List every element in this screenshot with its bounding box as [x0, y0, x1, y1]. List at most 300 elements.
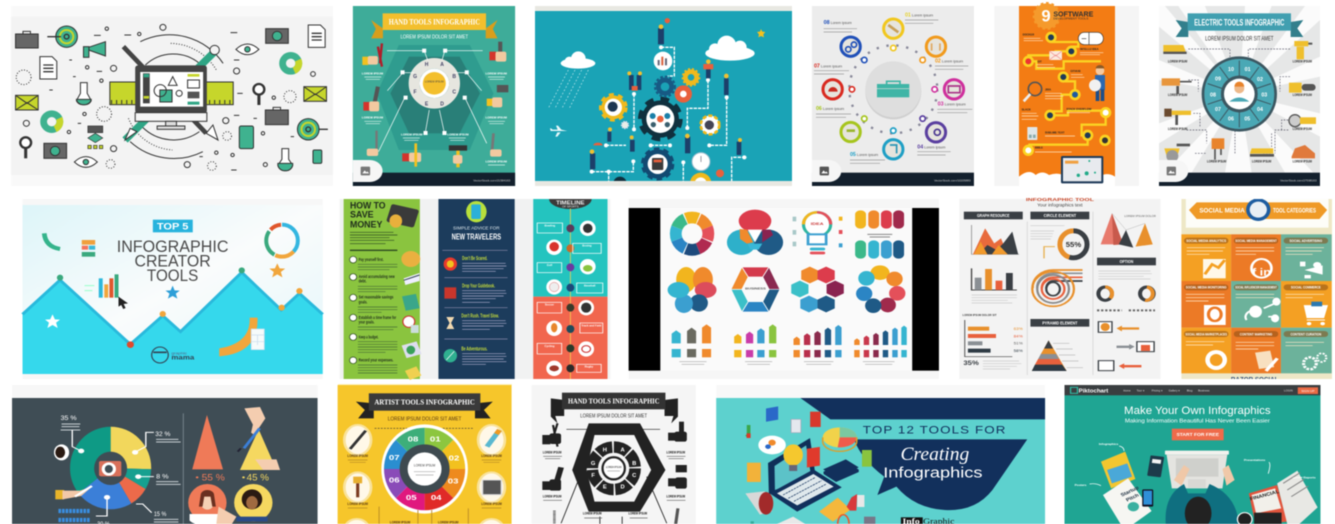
pie labels: 32 % [155, 430, 170, 438]
banner title [371, 13, 498, 41]
panel: graph resource charts [959, 198, 1160, 379]
panel: camera pie chart on dark [12, 385, 318, 524]
icon: flow chart [88, 126, 103, 149]
navy simple advice for new travelers [438, 199, 515, 379]
heading banner [1189, 198, 1327, 221]
timeline of sports: TIMELINE [556, 201, 585, 206]
footer bar: VectorStock.com/21584163 [473, 178, 511, 182]
captions [543, 450, 685, 515]
clipboard icon [1027, 127, 1037, 140]
venn circles [727, 210, 783, 255]
headline: Creating [900, 445, 969, 464]
tool captions: LOREM IPSUM [1168, 127, 1187, 131]
center toolbox [865, 61, 921, 119]
navigation bar: Business [1198, 389, 1210, 392]
logo: mama [171, 353, 195, 361]
panel: graph resource charts: OPTION [1120, 260, 1133, 265]
small captions under charts [678, 240, 895, 364]
orange curve and card [219, 318, 264, 356]
option donuts [1098, 287, 1154, 300]
decorative dots and dashes [16, 24, 315, 170]
hexagon backdrop [377, 45, 493, 150]
center wheel: 09 [1215, 76, 1221, 82]
numbered captions: 06 Lorem ipsum [816, 106, 844, 112]
numbered captions: 02 Lorem ipsum [935, 58, 963, 64]
pie icon [823, 427, 857, 451]
banner title: HAND TOOLS INFOGRAPHIC [389, 18, 480, 27]
chart bubble [654, 52, 672, 70]
airplane [550, 126, 567, 137]
captions: LOREM IPSUM [583, 511, 602, 515]
area chart [972, 225, 1019, 254]
navigation bar: Piktochart [1079, 389, 1108, 394]
category headings [1184, 238, 1328, 337]
pyramid [1032, 340, 1083, 371]
callout labels [1075, 442, 1316, 487]
green how to save money [344, 199, 422, 380]
desk laptop [1165, 451, 1229, 488]
panel: graph resource charts: CIRCLE ELEMENT [1044, 214, 1077, 219]
headline [863, 423, 1006, 481]
portraits [188, 484, 273, 524]
route nodes [1024, 33, 1110, 155]
captions: LOREM IPSUM [485, 71, 507, 75]
developer figure [1089, 65, 1105, 101]
captions: LOREM IPSUM [666, 450, 685, 454]
coffee cup [54, 444, 69, 460]
color wheel: 02 [449, 454, 460, 462]
ribbon title: LOREM IPSUM DOLOR SIT AMET [580, 414, 647, 419]
icon: magnifiers [20, 84, 264, 158]
title [1034, 3, 1093, 29]
mouse icon [1078, 32, 1103, 45]
donut pie chart [84, 441, 137, 495]
captions: LOREM IPSUM [362, 116, 384, 120]
captions [362, 71, 507, 163]
navigation bar: SIGN UP [1301, 389, 1315, 393]
navy simple advice for new travelers: Don't Rush. Travel Slow. [461, 314, 499, 319]
captions: LOREM IPSUM [485, 116, 507, 120]
petal chart [668, 267, 717, 313]
tool labels: JIRA [1045, 88, 1051, 92]
panel: piktochart landing page [1064, 385, 1320, 524]
green how to save money: Keep a budget. [359, 335, 378, 340]
green how to save money: Record your expenses. [359, 358, 393, 363]
pie labels: 35 % [61, 414, 77, 422]
55 percent donut [1060, 231, 1087, 258]
timeline of sports: Track and Field [581, 324, 602, 327]
hero text [1124, 404, 1271, 424]
captions: LOREM IPSUM [543, 450, 562, 454]
icon: briefcases [16, 31, 288, 125]
tool captions: LOREM IPSUM [347, 454, 368, 458]
center wheel: LOREM IPSUM [425, 80, 444, 84]
panel: social media tool categories: CONTENT MARKETING [1240, 332, 1272, 336]
letter wheel: B [632, 461, 636, 467]
heading banner: SOCIAL MEDIA [1199, 206, 1245, 214]
icon: eyes [74, 44, 259, 167]
panel: social media tool categories: SOCIAL MEDIA ANALYTICS [1186, 239, 1226, 243]
panel: top 5 infographic creator tools [23, 199, 323, 379]
tool captions: LOREM IPSUM [1168, 60, 1187, 64]
horizontal bars: 63% [1014, 327, 1023, 331]
worker figures [590, 28, 741, 169]
letter wheel: H [603, 447, 607, 453]
numbered captions: 07 Lorem ipsum [814, 63, 842, 69]
black hexagon ring [572, 423, 665, 512]
arrow bar charts [672, 324, 907, 357]
icon: envelopes [16, 87, 327, 110]
star [757, 29, 765, 37]
tool captions: LOREM IPSUM [347, 502, 368, 506]
letter wheel: LOREM IPSUM [606, 467, 622, 469]
numbered captions: 05 Lorem ipsum [850, 152, 878, 158]
color wheel [381, 424, 468, 514]
timeline of sports: Soccer [545, 303, 554, 307]
illustration clip group [548, 18, 765, 194]
tool labels: STACK OVERFLOW [1066, 107, 1092, 111]
black banner [356, 393, 493, 422]
laptop [769, 439, 842, 512]
cone percentages: 45 % [247, 473, 269, 483]
center wheel: G [413, 74, 417, 80]
panel: social media tool categories: SOCIAL COMMERCE [1291, 285, 1321, 289]
panel: graph resource charts: PYRAMID ELEMENT [1042, 321, 1078, 326]
posters and devices [1101, 452, 1318, 524]
envelope icon [1049, 51, 1062, 60]
letter wheel: A [621, 447, 626, 453]
panel: business infographic set [629, 199, 939, 379]
icon: flasks [76, 83, 293, 171]
tool labels [1022, 32, 1099, 150]
center wheel [413, 62, 456, 107]
color wheel: 01 [430, 435, 441, 443]
circle cluster [856, 265, 905, 313]
tool labels: BIBLE [1035, 146, 1043, 150]
category icons: f in [1252, 266, 1271, 278]
callout labels: Infographics [1099, 442, 1119, 446]
center wheel: B [452, 74, 456, 80]
segmented circle [676, 217, 708, 250]
center wheel: 08 [1210, 92, 1216, 98]
center wheel: 05 [1244, 116, 1250, 122]
title: DEVELOPMENT TOOLS [1053, 17, 1088, 21]
timeline of sports: Bowling [544, 224, 556, 227]
letter wheel: D [621, 484, 625, 490]
mountains [23, 272, 323, 374]
tool labels: INTELLIJ IDEA [1080, 47, 1099, 51]
top title: Your infographics text [1037, 203, 1083, 208]
headline: Infographics [883, 465, 982, 481]
gears [601, 69, 724, 194]
headline: TOP 12 TOOLS FOR [863, 423, 1006, 436]
navy simple advice for new travelers: SIMPLE ADVICE FOR [453, 226, 500, 231]
tool labels: GITHUB [1070, 69, 1081, 73]
icon: pencil and pen [123, 45, 219, 140]
icon: donut charts [44, 55, 299, 130]
yellow route [1028, 37, 1106, 145]
callout labels: Presentations [1244, 458, 1266, 462]
black banner: LOREM IPSUM DOLOR SIT AMET [388, 416, 461, 422]
hexagon ring [731, 267, 780, 312]
ring of dots [849, 45, 937, 133]
footer bar: VectorStock.com/27598163 [1280, 178, 1317, 182]
light bulb [803, 212, 831, 254]
center wheel: 10 [1228, 67, 1234, 73]
center wheel: 04 [1257, 107, 1263, 113]
tool captions: LOREM IPSUM [481, 502, 502, 506]
ring icons [828, 25, 960, 153]
panel: social media tool categories [1181, 198, 1332, 383]
title: TOP 5 [157, 222, 189, 232]
image badge [1159, 160, 1188, 182]
color wheel: 04 [431, 494, 442, 502]
person seen from above [1166, 465, 1239, 524]
pointing hand [55, 486, 93, 499]
ribbon title [551, 393, 678, 423]
navy simple advice for new travelers: Don't Be Scared. [462, 256, 488, 262]
green how to save money: SAVE [350, 210, 374, 220]
panel: top 12 tools for creating infographics [716, 385, 1045, 524]
title: 9 [1041, 6, 1051, 25]
footer bar [1159, 173, 1320, 186]
numbered captions: 04 Lorem ipsum [917, 144, 945, 150]
icon: ruler [110, 82, 233, 105]
panel: hand tools infographic [353, 6, 515, 186]
captions: LOREM IPSUM [543, 494, 562, 498]
navigation bar: Blog [1187, 389, 1193, 392]
center wheel: E [425, 101, 429, 107]
panel: flat line design tools [11, 6, 333, 186]
green how to save money: your goals. [359, 320, 374, 325]
navy banner shapes [800, 398, 1045, 510]
horizontal bars [965, 320, 1023, 357]
posters and devices: FINANCIAL [1249, 489, 1281, 502]
partial logo [901, 517, 954, 524]
icon: desktop monitor [135, 65, 207, 129]
color wheel: 07 [389, 454, 400, 462]
navy simple advice for new travelers: Drop Your Guidebook. [462, 284, 495, 289]
layout blocks [82, 240, 95, 257]
title: SOFTWARE [1053, 10, 1093, 19]
timeline of sports: Cycling [544, 344, 555, 348]
hex cluster [791, 267, 844, 312]
panel: electric tools infographic [1159, 6, 1320, 186]
tool captions: LOREM IPSUM [481, 454, 502, 458]
color wheel: 06 [389, 476, 400, 484]
light bulb: IDEA [811, 222, 824, 227]
category icons [1203, 259, 1327, 371]
captions: LOREM IPSUM [401, 132, 423, 136]
cone percentages: 55 % [202, 473, 225, 483]
silhouettes [542, 422, 687, 524]
people rows [1097, 307, 1155, 313]
tool labels: SLACK [1022, 107, 1031, 111]
center wheel: 03 [1261, 92, 1267, 98]
camera hub [94, 452, 127, 485]
center wheel: 01 [1245, 67, 1251, 73]
green how to save money: MONEY [350, 220, 383, 230]
leader lines [561, 428, 667, 524]
device rows [1098, 322, 1154, 371]
top edge of row three [338, 384, 512, 385]
numbered captions [814, 13, 966, 158]
35 percent note [963, 359, 1021, 369]
title [117, 220, 229, 285]
hero text: Making Information Beautiful Has Never Been Easier [1125, 419, 1270, 424]
top title: INFOGRAPHIC TOOL [1026, 198, 1095, 203]
cones: LOREM IPSUM DOLOR [1124, 214, 1156, 218]
tool captions: LOREM IPSUM [1168, 93, 1187, 97]
title ribbon: LOREM IPSUM DOLOR SIT AMET [1205, 35, 1274, 42]
partial logo: RAZOR SOCIAL [1231, 376, 1279, 383]
green arc [44, 233, 60, 249]
logo: graphic [171, 351, 188, 355]
panel: social media tool categories: SOCIAL MEDIA MONITORING [1186, 285, 1227, 289]
light bulb [783, 444, 803, 471]
navigation bar [1064, 385, 1320, 395]
panel: black hand tools infographic [532, 385, 696, 524]
column chart [972, 268, 1017, 290]
footer bar: VectorStock.com/10205883 [934, 178, 971, 182]
title: CREATOR [134, 251, 211, 270]
tool captions [1168, 60, 1312, 163]
tool labels: DOCKER [1023, 32, 1034, 36]
tool captions: LOREM IPSUM [1252, 159, 1271, 163]
navigation bar: Pricing ▾ [1152, 389, 1163, 392]
black side bars [629, 208, 939, 371]
cone percentages [192, 407, 280, 483]
timeline of sports: Baseball [584, 284, 596, 287]
center wheel: 02 [1257, 77, 1263, 83]
panel: social media tool categories: SOCIAL INFLUENCER MANAGEMENT [1235, 285, 1277, 289]
title: TOOLS [147, 265, 198, 285]
numbered rings [823, 19, 964, 159]
tool captions: LOREM IPSUM [1293, 60, 1312, 64]
center wheel: F [414, 89, 417, 95]
horizontal bars: 58% [1014, 349, 1023, 353]
pie labels [61, 414, 170, 524]
callout labels: Posters [1075, 483, 1087, 487]
ribbon title: HAND TOOLS INFOGRAPHIC [568, 397, 659, 405]
green how to save money: Establish a time frame for [359, 315, 396, 321]
captions: LOREM IPSUM [485, 159, 507, 163]
panel: three long infographics [340, 199, 610, 380]
posters and devices: Pitch [1125, 493, 1140, 503]
numbered captions: 01 Lorem ipsum [905, 13, 933, 19]
black banner: ARTIST TOOLS INFOGRAPHIC [374, 399, 475, 406]
dotted connectors [1187, 49, 1290, 154]
numbered captions: 08 Lorem ipsum [824, 20, 852, 26]
center wheel: 07 [1215, 107, 1221, 113]
numbered captions: 03 Lorem ipsum [938, 101, 966, 107]
captions: LOREM IPSUM [447, 132, 469, 136]
icon: cameras [44, 29, 288, 158]
center wheel: D [440, 101, 444, 107]
navigation bar: Gallery ▾ [1169, 389, 1180, 392]
center wheel: H [425, 62, 429, 68]
captions: LOREM IPSUM [666, 494, 685, 498]
icon: megaphone [83, 42, 105, 57]
posters and devices: Startup [1120, 485, 1140, 498]
center wheel: A [440, 62, 444, 68]
green how to save money: HOW TO [350, 201, 386, 211]
footer bar [812, 173, 974, 186]
people pictogram rows [58, 511, 90, 520]
timeline of sports: OF SPORTS [562, 205, 579, 208]
center wheel: 06 [1228, 116, 1234, 122]
stars [45, 263, 285, 328]
icon: targets [47, 26, 328, 140]
title ribbon [1176, 13, 1303, 42]
navy simple advice for new travelers: NEW TRAVELERS [452, 232, 501, 242]
color wheel: 05 [406, 494, 417, 502]
55 percent donut: 55% [1066, 240, 1081, 249]
title: INFOGRAPHIC [117, 236, 229, 256]
panel: gears and workers illustration [535, 6, 792, 194]
tool bubbles [344, 425, 505, 524]
timeline of sports: Rugby [585, 365, 594, 369]
tool captions [347, 454, 502, 524]
dashed connectors [592, 47, 747, 182]
navy simple advice for new travelers: Be Adventurous. [461, 347, 488, 352]
pie labels: 8 % [156, 473, 169, 480]
hexagon ring: BUSINESS [745, 287, 767, 290]
icon: documents [40, 25, 325, 79]
panel: artist tools infographic [338, 385, 512, 524]
tool icons [1162, 41, 1316, 162]
color wheel: 03 [448, 478, 459, 485]
panel: social media tool categories: SOCIAL MEDIA MANAGEMENT [1235, 239, 1277, 243]
rain [548, 70, 588, 108]
image badge [812, 160, 841, 182]
banner title: LOREM IPSUM DOLOR SIT AMET [401, 35, 469, 41]
letter wheel: G [591, 461, 596, 467]
timeline of sports [533, 199, 608, 379]
timeline of sports: Boxing [582, 244, 592, 248]
letter wheel [591, 447, 636, 490]
pie labels: 15 % [154, 510, 166, 518]
green how to save money: goals. [359, 300, 367, 305]
letter wheel: E [603, 484, 607, 490]
captions: LOREM IPSUM [362, 71, 384, 75]
tool captions: LOREM IPSUM [1207, 159, 1226, 163]
magnifier icon [1024, 82, 1042, 101]
tool labels: SUBLIME TEXT [1045, 131, 1065, 135]
icon columns near bulb [793, 217, 842, 247]
35 percent note: 35% [963, 359, 979, 367]
concentric arcs [1032, 270, 1083, 306]
start button: START FOR FREE [1176, 432, 1220, 438]
green how to save money: debt. [359, 279, 367, 284]
color wheel: LOREM IPSUM [414, 463, 436, 467]
peak markers [57, 267, 303, 348]
timeline of sports: Golf [547, 263, 552, 267]
tool captions: LOREM IPSUM [1293, 159, 1312, 163]
top title [1026, 198, 1095, 208]
footer bar [353, 173, 515, 186]
center wheel [1202, 56, 1277, 132]
green how to save money: Pay yourself first. [359, 257, 384, 263]
navigation bar: LOGIN [1284, 389, 1293, 392]
letter wheel: F [591, 473, 595, 479]
clouds [561, 36, 755, 69]
logo [152, 347, 195, 363]
green how to save money: Avoid accumulating new [359, 274, 395, 280]
panel: social media tool categories: SOCIAL MEDIA MARKETPLACES [1185, 332, 1227, 336]
sun rays [1159, 6, 1320, 173]
letter wheel: C [632, 473, 636, 479]
